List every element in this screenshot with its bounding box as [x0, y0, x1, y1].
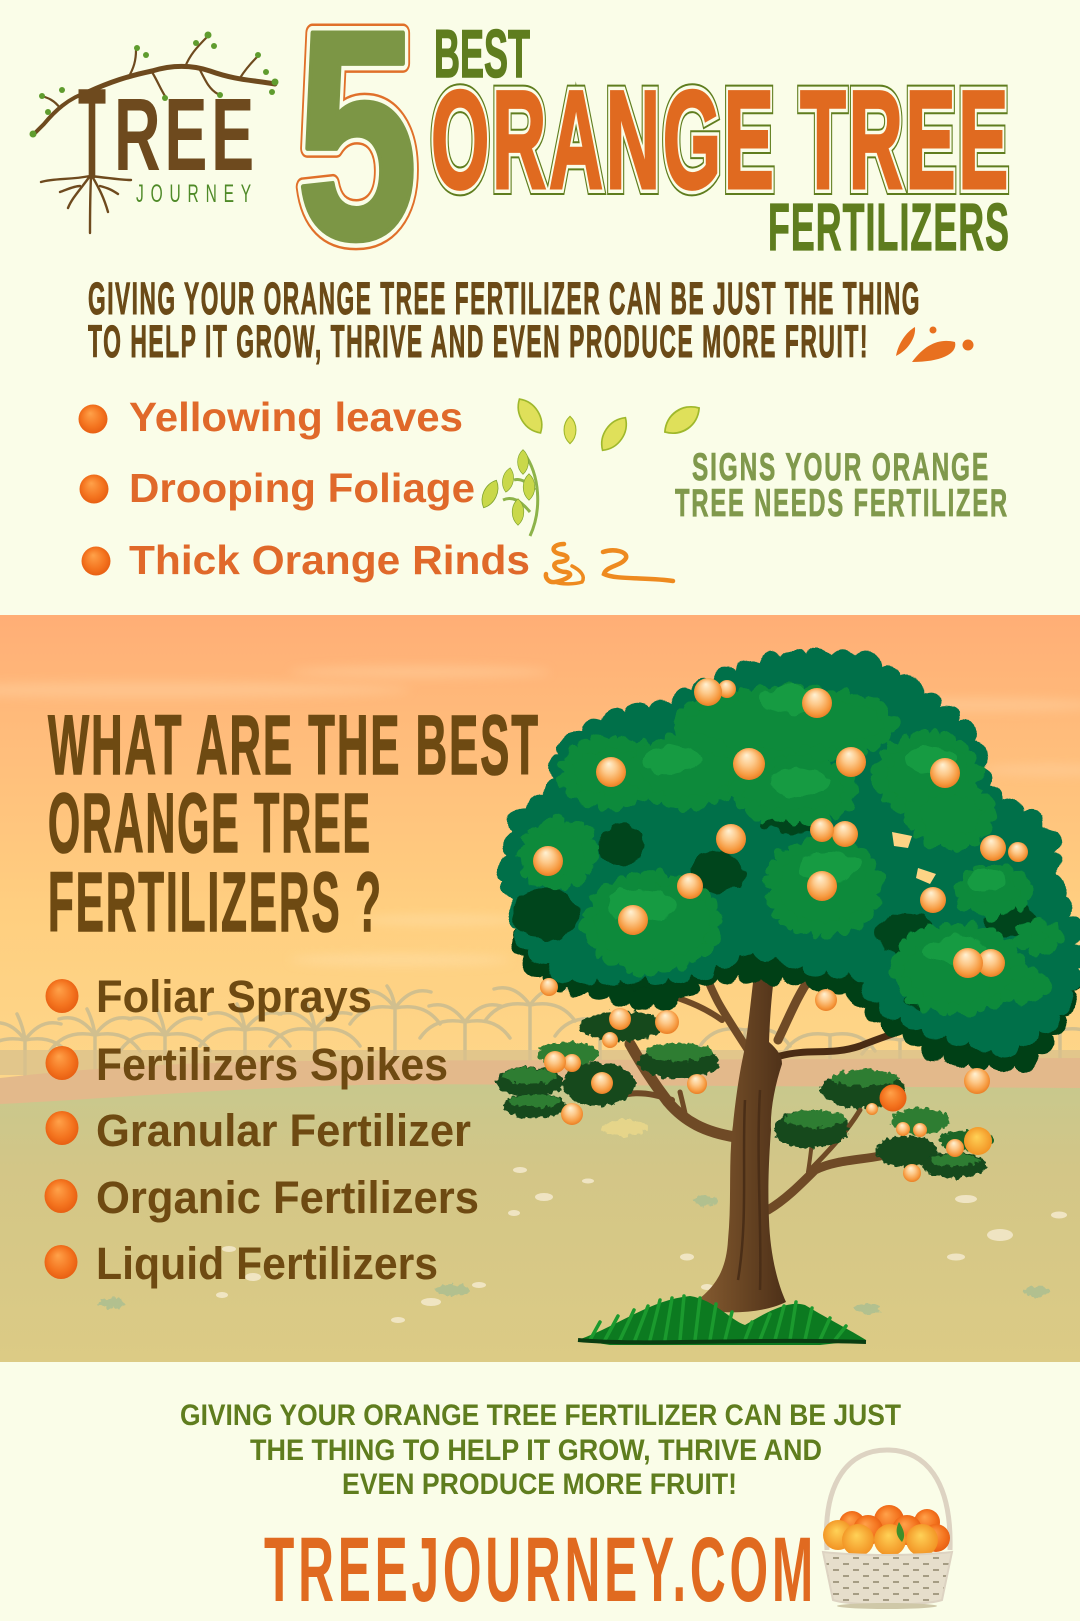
- signs list: [78, 394, 530, 583]
- item: foliar sprays: Foliar Sprays: [96, 971, 372, 1022]
- pink hill band: [0, 1058, 1080, 1110]
- meadow ground: [0, 1084, 1080, 1362]
- sky: [0, 615, 1080, 1362]
- footer text: THE THING TO HELP IT GROW, THRIVE AND: [250, 1434, 822, 1467]
- meadow flowers: [216, 1167, 1067, 1323]
- distant palms: [0, 986, 1080, 1075]
- icon: drooping foliage sprig: [478, 450, 538, 536]
- sky clouds: [0, 666, 1080, 966]
- logo leaves: [30, 32, 278, 138]
- icon: orange rind peels: [546, 544, 673, 584]
- title: [296, 0, 1011, 302]
- footer background: [0, 1362, 1080, 1621]
- BEST: BEST: [434, 16, 530, 92]
- left foliage pads: [496, 1011, 719, 1118]
- signs heading: [675, 446, 1009, 525]
- basket handle: [826, 1450, 950, 1550]
- canopy outer foliage: [512, 660, 1072, 1045]
- sign: drooping foliage: Drooping Foliage: [129, 465, 475, 511]
- ripe orange: [880, 1084, 906, 1112]
- basket body: [823, 1552, 952, 1604]
- item: granular fertilizer: Granular Fertilizer: [96, 1105, 471, 1156]
- item: fertilizers spikes: Fertilizers Spikes: [96, 1039, 448, 1090]
- panel: landscape background: [0, 615, 1080, 1362]
- panel heading: WHAT ARE THE BEST: [48, 698, 540, 792]
- footer text: EVEN PRODUCE MORE FRUIT!: [342, 1468, 737, 1501]
- basket shadow: [837, 1603, 937, 1609]
- canopy leaf highlights: [606, 686, 1003, 964]
- grass at tree base: [578, 1296, 866, 1345]
- item: organic fertilizers: Organic Fertilizers: [96, 1172, 479, 1223]
- logo branches: [34, 36, 275, 134]
- canopy sky gaps: [826, 806, 936, 884]
- footer text: GIVING YOUR ORANGE TREE FERTILIZER CAN BE JUST: [180, 1399, 901, 1432]
- oranges: [533, 678, 1028, 1182]
- sign: yellowing leaves: Yellowing leaves: [129, 394, 463, 440]
- trunk bark lines: [738, 1090, 760, 1290]
- logo: Tree Journey: T: [78, 62, 106, 206]
- icon: falling yellow leaves: [512, 394, 705, 456]
- logo JOURNEY word: JOURNEY: [136, 180, 258, 208]
- illustration: orange tree: [496, 660, 1072, 1345]
- logo roots: [41, 176, 131, 233]
- palm undergrowth band: [0, 1050, 1080, 1075]
- item: liquid fertilizers: Liquid Fertilizers: [96, 1238, 438, 1289]
- meadow grass tufts: [98, 1120, 1050, 1313]
- icon: basket of oranges: [823, 1450, 952, 1609]
- logo: Tree Journey: [30, 32, 278, 233]
- panel heading: [48, 698, 540, 949]
- sign: thick orange rinds: Thick Orange Rinds: [129, 537, 530, 583]
- yellow ripe orange: [964, 1127, 992, 1155]
- canopy dark patches: [511, 806, 1036, 1009]
- panel heading: ORANGE TREE: [48, 776, 372, 870]
- lower canopy shadow layer: [524, 880, 1072, 1061]
- footer text: [180, 1399, 901, 1501]
- intro text: [88, 273, 921, 367]
- canopy green tufts: [523, 692, 1057, 1009]
- basket oranges: [823, 1505, 950, 1556]
- tree branches: [628, 972, 920, 1210]
- fertilizer list: [44, 971, 479, 1289]
- tree trunk: [690, 941, 786, 1312]
- logo wordmark REE: REE: [114, 77, 258, 192]
- panel heading: FERTILIZERS ?: [48, 855, 383, 949]
- icon: juice splash: [896, 326, 974, 362]
- right foliage pads: [773, 1070, 993, 1178]
